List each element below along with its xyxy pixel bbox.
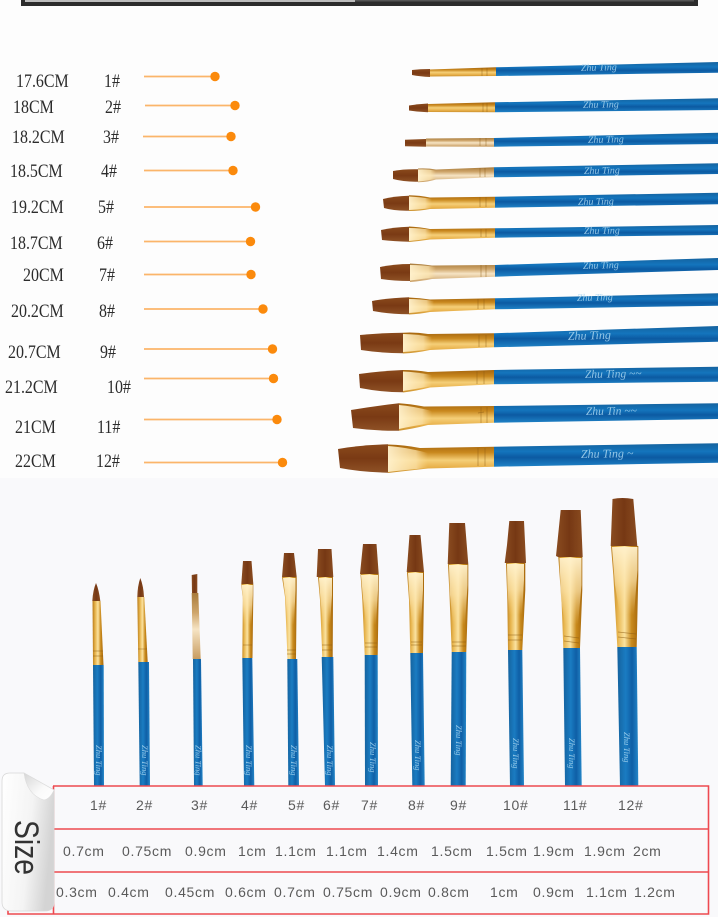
row 4 length: 18.5CM (10, 160, 63, 181)
brush 9 vertical: Zhu Ting (454, 725, 464, 755)
brush 3 vertical: Zhu Ting (194, 745, 204, 775)
brush 8 vertical: Zhu Ting (413, 740, 423, 770)
brush 4 vertical (241, 561, 254, 786)
brush 1 horizontal: Zhu Ting (581, 62, 617, 74)
row: brush numbers: 7# (361, 797, 378, 813)
brush 9 vertical (448, 523, 468, 786)
brush 5 horizontal (383, 193, 718, 211)
brush 7 vertical (360, 544, 379, 786)
row: bristle length: 1.1cm (275, 843, 317, 859)
brush 3 horizontal (405, 133, 718, 147)
brush 7 horizontal (380, 258, 718, 282)
row: brush numbers: 6# (323, 797, 340, 813)
row 9 length: 9# (100, 341, 116, 362)
brush 2 horizontal (409, 98, 718, 112)
row 11 length: 11# (97, 416, 121, 437)
row: bristle length: 1.4cm (377, 843, 419, 859)
brush 2 horizontal: Zhu Ting (583, 99, 619, 111)
row: brush numbers: 3# (191, 797, 208, 813)
brush 3 horizontal: Zhu Ting (588, 134, 624, 146)
row 7 length: 7# (99, 264, 115, 285)
brush 3 vertical (192, 574, 204, 786)
size table (8, 786, 708, 914)
row 12 length: 22CM (15, 450, 56, 471)
row: bristle length (63, 843, 662, 859)
brush 11 horizontal (351, 403, 718, 431)
row 11 length (15, 415, 282, 437)
row: bristle length: 1.9cm (533, 843, 575, 859)
vertical brushes (92, 498, 638, 786)
brush 6 vertical: Zhu Ting (325, 745, 335, 775)
row: bristle width: 1.2cm (634, 884, 676, 900)
row 7 length: 20CM (23, 264, 64, 285)
row: bristle length: 1.1cm (326, 843, 368, 859)
row: bristle width: 0.4cm (108, 884, 150, 900)
row 8 length (11, 300, 268, 321)
row 6 length: 6# (97, 232, 113, 253)
row 5 length (11, 196, 260, 217)
brush 2 vertical: Zhu Ting (140, 745, 150, 775)
brush 11 vertical (556, 510, 583, 786)
row: brush numbers: 2# (136, 797, 153, 813)
row 10 length: 10# (107, 376, 131, 397)
brush 4 horizontal: Zhu Ting (584, 165, 620, 177)
brush 4 vertical: Zhu Ting (244, 745, 254, 775)
row: brush numbers (90, 797, 643, 813)
row 8 length: 8# (99, 300, 115, 321)
brush 4 horizontal (393, 163, 718, 182)
row 3 length: 18.2CM (12, 126, 65, 147)
row: bristle width: 0.7cm (274, 884, 316, 900)
brush 8 horizontal: Zhu Ting (577, 292, 613, 304)
row 2 length (13, 96, 240, 117)
brush 11 vertical: Zhu Ting (567, 738, 577, 768)
top dark bar (21, 0, 698, 6)
brush 12 horizontal (338, 443, 718, 473)
row 7 length (23, 264, 256, 285)
row: brush numbers: 4# (241, 797, 258, 813)
brush 6 vertical (317, 549, 335, 786)
row: brush numbers: 11# (563, 797, 587, 813)
row: bristle width: 0.75cm (323, 884, 373, 900)
row: bristle width: 0.9cm (380, 884, 422, 900)
brush 10 vertical (505, 521, 526, 786)
row 1 length: 17.6CM (16, 70, 69, 91)
row 11 length: 21CM (15, 416, 56, 437)
row 5 length: 19.2CM (11, 196, 64, 217)
row 6 length (10, 232, 255, 253)
brush 7 vertical: Zhu Ting (368, 742, 378, 772)
row: bristle width: 0.6cm (225, 884, 267, 900)
row: bristle width (56, 884, 676, 900)
row: bristle length: 1cm (238, 843, 267, 859)
row: brush numbers: 5# (288, 797, 305, 813)
row 2 length: 2# (105, 96, 121, 117)
brush 5 vertical (282, 553, 299, 786)
row 8 length: 20.2CM (11, 300, 64, 321)
brush 1 vertical (92, 583, 104, 786)
brush 1 horizontal (412, 62, 718, 77)
brush 5 horizontal: Zhu Ting (578, 196, 614, 208)
row: brush numbers: 9# (450, 797, 467, 813)
brush 6 horizontal: Zhu Ting (584, 225, 620, 237)
row: bristle length: 2cm (633, 843, 662, 859)
brush 10 horizontal: Zhu Ting ~~ (585, 368, 642, 381)
row 10 length: 21.2CM (5, 376, 58, 397)
row: bristle length: 1.5cm (431, 843, 473, 859)
row: bristle length: 0.75cm (122, 843, 172, 859)
brush 6 horizontal (381, 225, 718, 242)
row 12 length: 12# (96, 450, 120, 471)
row: brush numbers: 10# (503, 797, 528, 813)
row 4 length (10, 160, 238, 181)
horizontal brushes (338, 62, 718, 473)
row: bristle width: 0.45cm (165, 884, 215, 900)
brush 1 vertical: Zhu Ting (94, 745, 104, 775)
row: bristle length: 0.7cm (63, 843, 105, 859)
row: bristle length: 1.5cm (486, 843, 528, 859)
length labels and guide lines (5, 70, 287, 471)
row: brush numbers: 12# (618, 797, 643, 813)
row 3 length (12, 126, 236, 147)
row 3 length: 3# (103, 126, 119, 147)
row: bristle width: 0.9cm (533, 884, 575, 900)
brush 12 vertical (611, 498, 638, 786)
row 5 length: 5# (98, 196, 114, 217)
row 9 length (8, 341, 277, 362)
row: brush numbers: 8# (408, 797, 425, 813)
row: bristle width: 1cm (490, 884, 519, 900)
brush 11 horizontal: Zhu Tin ~~ (586, 405, 638, 418)
row: bristle width: 1.1cm (586, 884, 628, 900)
size tab with curled corner (2, 773, 54, 911)
brush 8 horizontal (372, 292, 718, 314)
row 1 length: 1# (104, 70, 120, 91)
row 4 length: 4# (101, 160, 117, 181)
row 1 length (16, 70, 220, 91)
lower section background (0, 478, 718, 917)
row 2 length: 18CM (13, 96, 54, 117)
brush 5 vertical: Zhu Ting (289, 745, 299, 775)
row: bristle length: 1.9cm (584, 843, 626, 859)
brush 10 horizontal (359, 367, 718, 392)
row 12 length (15, 450, 287, 471)
row: brush numbers: 1# (90, 797, 107, 813)
brush 8 vertical (407, 535, 425, 786)
brush 9 horizontal: Zhu Ting (568, 328, 611, 343)
brush 12 vertical: Zhu Ting (622, 732, 632, 762)
brush 10 vertical: Zhu Ting (511, 738, 521, 768)
table frame (8, 786, 708, 914)
row 10 length (5, 374, 278, 397)
row 9 length: 20.7CM (8, 341, 61, 362)
row 6 length: 18.7CM (10, 232, 63, 253)
row: bristle width: 0.8cm (428, 884, 470, 900)
brush 7 horizontal: Zhu Ting (583, 260, 619, 272)
row: bristle width: 0.3cm (56, 884, 98, 900)
size tab with curled corner: Size (7, 820, 45, 875)
brush 12 horizontal: Zhu Ting ~ (581, 446, 634, 461)
brush 2 vertical (137, 578, 150, 786)
brush 9 horizontal (360, 326, 718, 354)
row: bristle length: 0.9cm (185, 843, 227, 859)
